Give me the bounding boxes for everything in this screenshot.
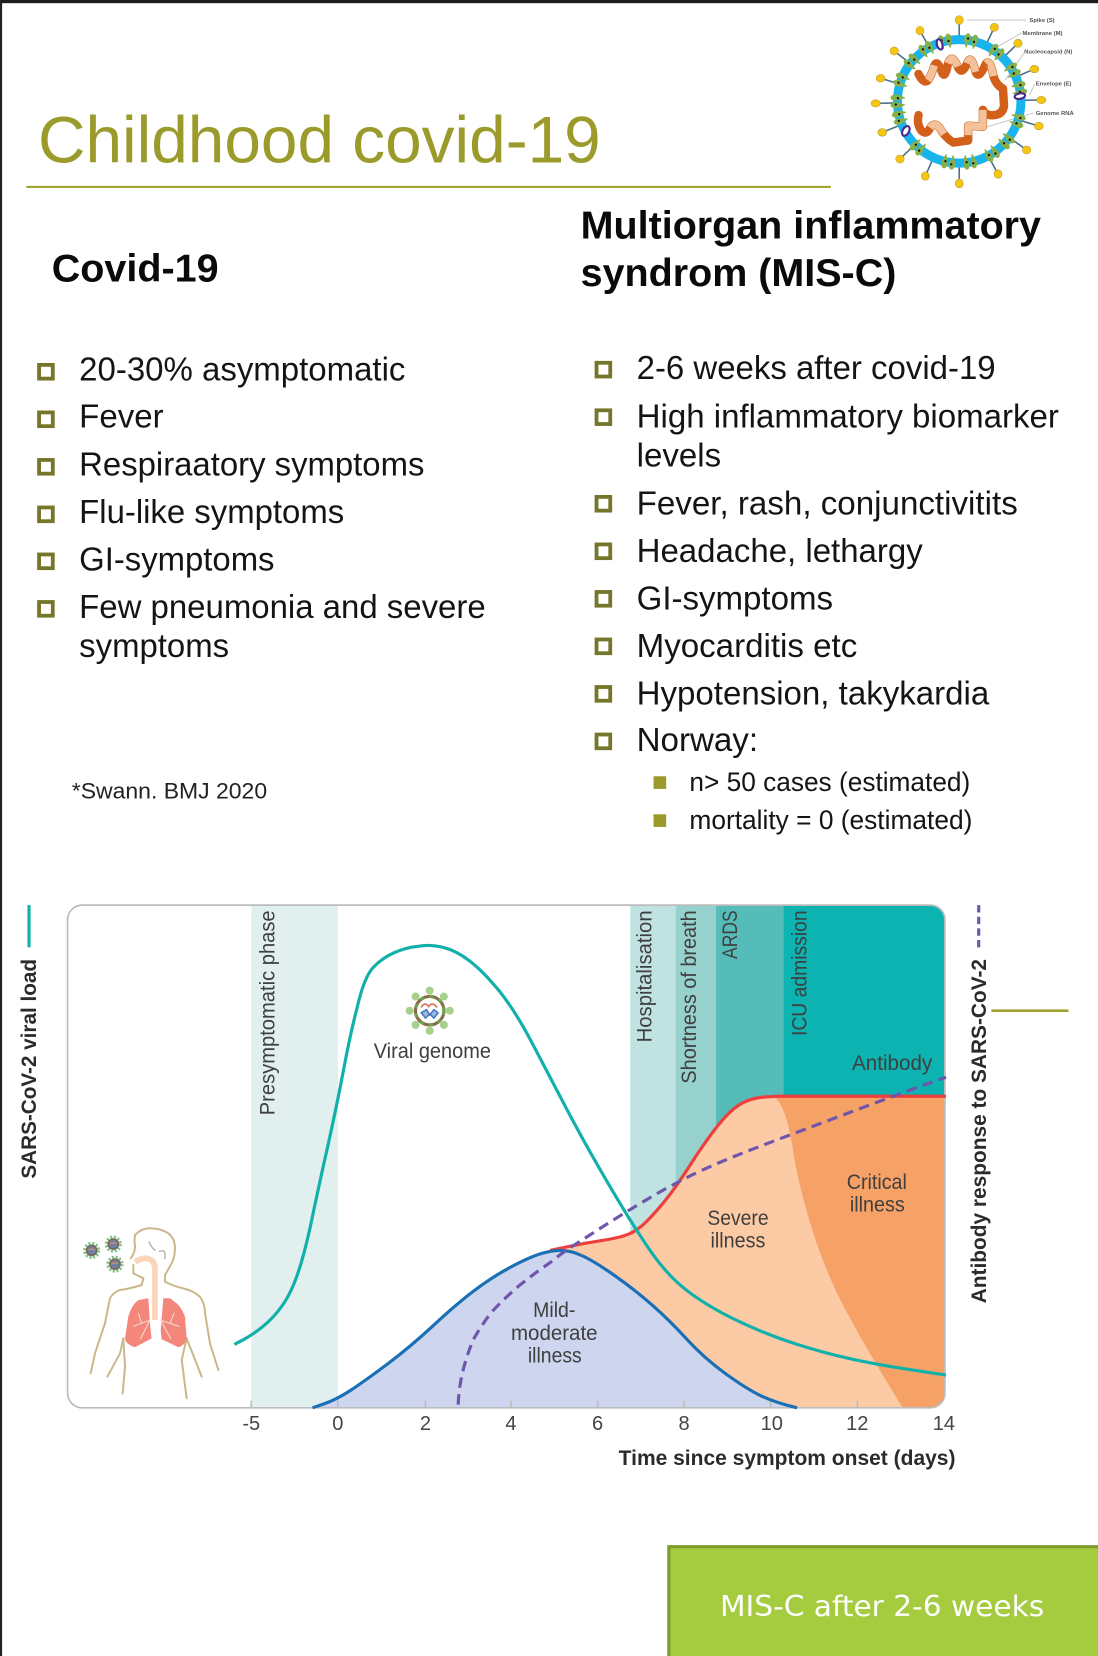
panel: Covid-19 symptom list: 20-30% asymptomatic	[79, 351, 405, 389]
title: Childhood covid-19	[38, 104, 601, 177]
axis title: viral load: SARS-CoV-2 viral load	[18, 959, 41, 1179]
panel: MIS-C symptom list: GI-symptoms	[637, 579, 833, 617]
panel: MIS-C symptom list: Fever, rash, conjunctivitits	[637, 484, 1018, 522]
panel: Covid-19 symptom list: Flu-like symptoms	[79, 493, 344, 531]
panel: MIS-C symptom list: Headache, lethargy	[637, 532, 923, 570]
x-axis ticks: 8	[679, 1413, 690, 1435]
x-axis ticks: -5	[242, 1413, 260, 1435]
panel: MIS-C symptom list: mortality = 0 (estimated)	[689, 805, 972, 835]
x-axis ticks: 6	[592, 1413, 603, 1435]
phase labels: ICU admission	[789, 910, 812, 1036]
panel: Covid-19 symptom list: Fever	[79, 398, 164, 436]
text: critical illness: Critical	[847, 1171, 907, 1194]
panel: MIS-C symptom list: Myocarditis etc	[637, 627, 857, 665]
panel: MIS-C symptom list: n> 50 cases (estimated)	[689, 767, 970, 797]
panel: MIS-C symptom list	[597, 349, 1059, 835]
icon: viral genome	[406, 987, 454, 1035]
icon: virus particles	[84, 1237, 122, 1271]
panel: Covid-19 symptom list: Respiraatory symptoms	[79, 445, 424, 483]
panel: Covid-19 symptom list: Few pneumonia and severe	[79, 588, 486, 626]
panel: Covid-19 symptom list: symptoms	[79, 627, 229, 665]
heading: Multiorgan inflammatory syndrom: Multiorgan inflammatory	[581, 205, 1041, 248]
x-axis ticks	[242, 1400, 955, 1435]
heading: Multiorgan inflammatory syndrom	[581, 205, 1041, 295]
callout: MIS-C after 2-6 weeks	[669, 1547, 1098, 1656]
callout: MIS-C after 2-6 weeks: MIS-C after 2-6 weeks	[720, 1590, 1044, 1623]
heading: Multiorgan inflammatory syndrom: syndrom (MIS-C)	[581, 252, 896, 295]
text: severe illness	[707, 1207, 769, 1252]
x-axis ticks: 10	[761, 1413, 783, 1435]
x-axis ticks: 2	[420, 1413, 431, 1435]
phase labels: Shortness of breath	[678, 910, 701, 1084]
citation: *Swann. BMJ 2020	[72, 778, 267, 803]
x-axis ticks: 4	[505, 1413, 517, 1435]
antibody response curve	[458, 1077, 946, 1405]
panel: Covid-19 symptom list: GI-symptoms	[79, 540, 275, 578]
text: mild-moderate illness	[511, 1299, 598, 1367]
panel: MIS-C symptom list: 2-6 weeks after covid-19	[637, 349, 996, 387]
text: mild-moderate illness: Mild-	[533, 1299, 575, 1322]
phase labels	[257, 910, 812, 1115]
panel: MIS-C symptom list: Norway:	[637, 721, 758, 759]
icon: coronavirus structure diagram: Spike (S)	[1029, 18, 1055, 24]
phase labels: Hospitalisation	[633, 910, 656, 1042]
phase labels: Presymptomatic phase	[257, 910, 279, 1115]
x-axis ticks: 12	[846, 1413, 868, 1435]
text: critical illness: illness	[850, 1193, 905, 1216]
icon: coronavirus structure diagram: Genome RNA	[1036, 111, 1075, 117]
panel: MIS-C symptom list: High inflammatory biomarker	[637, 398, 1059, 436]
icon: coronavirus structure diagram: Membrane (M)	[1023, 31, 1063, 37]
blue illness curve	[313, 1250, 797, 1408]
text: mild-moderate illness: moderate	[511, 1322, 598, 1345]
text: severe illness: illness	[711, 1229, 765, 1252]
text: critical illness	[847, 1171, 907, 1216]
icon: coronavirus structure diagram: Envelope (E)	[1036, 82, 1072, 88]
axis title: antibody response: Antibody response to SARS-CoV-2	[968, 959, 991, 1303]
axis title: time: Time since symptom onset (days)	[619, 1447, 955, 1470]
text: antibody: Antibody	[852, 1052, 933, 1075]
x-axis ticks: 14	[933, 1413, 955, 1435]
x-axis ticks: 0	[332, 1413, 343, 1435]
text: viral genome: Viral genome	[374, 1040, 491, 1063]
plot area	[251, 906, 944, 1407]
icon: coronavirus structure diagram	[871, 16, 1075, 188]
panel: Covid-19 symptom list	[39, 351, 486, 665]
text: mild-moderate illness: illness	[528, 1344, 582, 1367]
panel: MIS-C symptom list: Hypotension, takykardia	[637, 674, 989, 712]
icon: human lungs figure	[91, 1228, 218, 1398]
heading: Covid-19: Covid-19	[52, 247, 219, 290]
icon: coronavirus structure diagram: Nucleocapsid (N)	[1024, 49, 1072, 55]
phase labels: ARDS	[719, 910, 742, 959]
text: severe illness: Severe	[707, 1207, 769, 1230]
viral load curve	[234, 945, 946, 1375]
panel: MIS-C symptom list: levels	[637, 436, 721, 474]
chart: disease course over time	[18, 905, 991, 1470]
red illness curve	[550, 1096, 946, 1250]
